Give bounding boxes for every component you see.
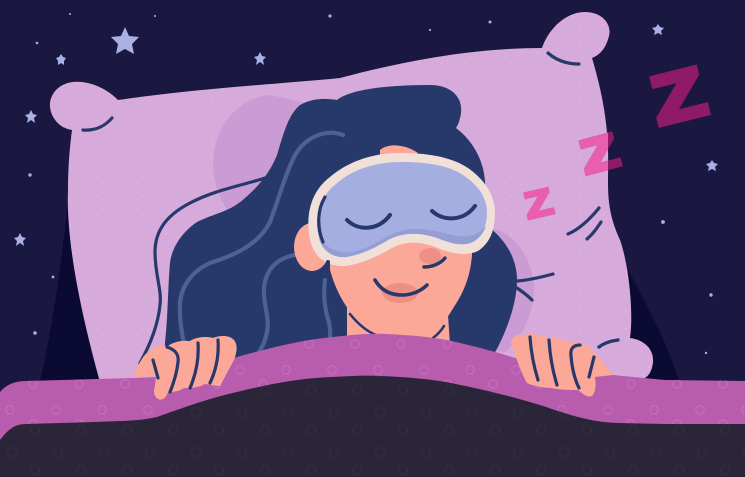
nose <box>424 258 445 267</box>
hair wisp by ear <box>326 262 330 270</box>
pillow corner crease <box>599 340 618 347</box>
medium Z: Z <box>575 124 624 184</box>
pillow <box>50 12 653 382</box>
blanket <box>0 334 745 477</box>
neck <box>347 300 450 345</box>
pillow crease lines <box>83 53 601 363</box>
lip shade <box>382 283 418 303</box>
pillow shadow left <box>40 160 110 382</box>
right hand <box>511 334 613 397</box>
right closed eye <box>432 206 475 218</box>
jaw lines <box>350 314 444 338</box>
head shadow on pillow <box>213 95 534 352</box>
stars <box>14 13 718 354</box>
sleep mask <box>308 153 495 266</box>
mask side seam <box>319 197 325 242</box>
medium Z: Z <box>575 124 624 184</box>
hair highlight strands <box>180 133 343 355</box>
large Z: Z <box>644 53 713 140</box>
small Z: Z <box>521 180 557 227</box>
left hand <box>133 336 237 400</box>
face <box>294 145 472 338</box>
pillow shadow right <box>628 270 680 384</box>
blanket dark underside <box>0 376 745 477</box>
left closed eye <box>347 215 390 228</box>
medium Z <box>578 131 623 176</box>
mouth <box>375 280 427 295</box>
nose shade <box>419 248 441 264</box>
hair <box>160 85 517 380</box>
